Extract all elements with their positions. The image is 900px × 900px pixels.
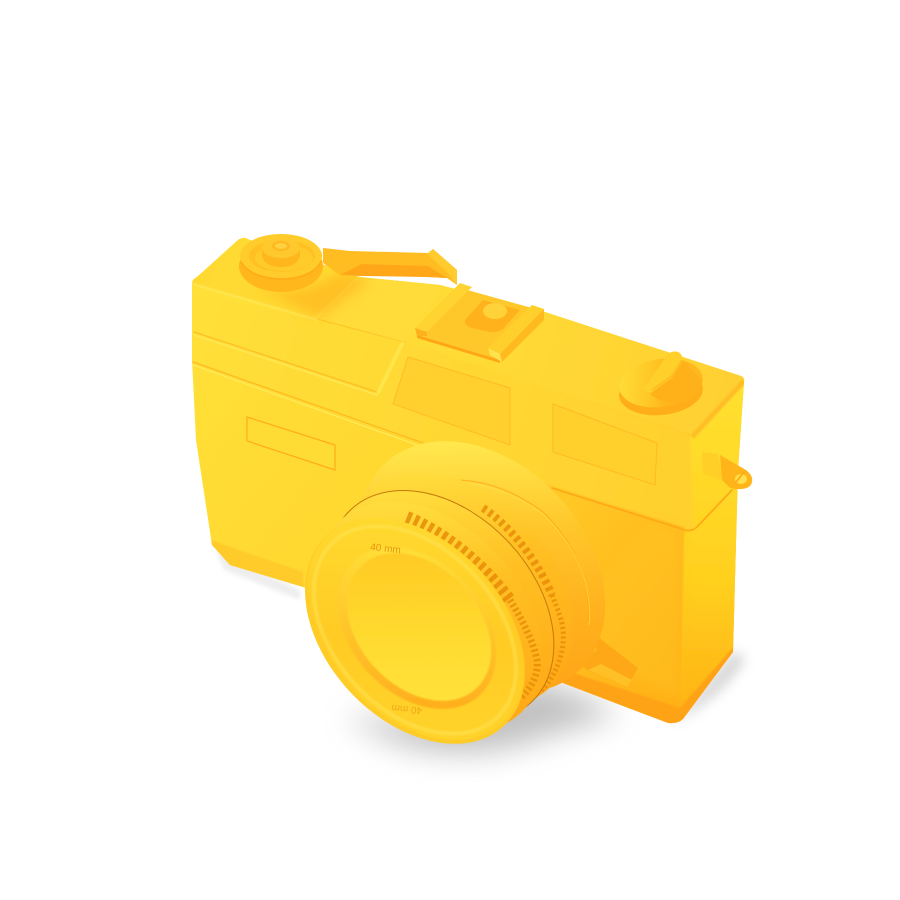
lens: front knurled ring [273, 458, 587, 776]
body: shadow behind dial [271, 272, 366, 320]
body: lower left chamfer [211, 540, 304, 588]
shutter dial: orange wedge [650, 360, 702, 403]
strap lug [702, 452, 752, 489]
hot shoe: button recess [465, 300, 520, 332]
lens: front rim [261, 475, 569, 787]
lens: focus ring [297, 427, 619, 753]
lens: focal length mark top: 40 mm [370, 542, 401, 556]
tripod lever [575, 633, 638, 687]
lens: centre plate [318, 525, 520, 729]
lens: seam between rings [283, 446, 599, 766]
hot shoe: left rail [415, 283, 472, 332]
viewfinder window [393, 357, 510, 445]
body: right side face [680, 372, 750, 712]
camera body [180, 230, 760, 730]
body: top plate lip near corner [692, 381, 744, 437]
lens: inner recess [306, 516, 528, 740]
lens: rear knurling [483, 508, 563, 692]
body: viewfinder hump [317, 277, 445, 342]
shutter dial: grip ridge [643, 351, 683, 393]
ground shadow [215, 550, 745, 753]
lens: rear barrel [309, 392, 655, 742]
hot shoe [415, 283, 544, 363]
hot shoe: centre button [483, 303, 507, 319]
lens [261, 392, 655, 787]
body: silhouette [180, 230, 760, 730]
hot shoe: right rail [488, 305, 544, 354]
body: soft light on lower right [560, 520, 680, 700]
rewind dial [239, 234, 323, 292]
shutter dial: side wall [617, 365, 705, 419]
body: seam lines [193, 277, 732, 531]
hot shoe: base plate [417, 288, 532, 362]
shutter dial: top [616, 353, 706, 413]
rewind dial: knob [262, 248, 300, 267]
body: bottom chamfer [562, 647, 733, 724]
body: top plate [185, 232, 750, 435]
lens: focal length mark bottom: 40 mm [391, 701, 423, 716]
rangefinder window [553, 404, 657, 485]
nameplate rectangle [247, 417, 335, 470]
body: soft-shaded faces [185, 232, 750, 728]
body: upper front band [192, 360, 692, 529]
lever [323, 248, 457, 285]
illustration: yellow 3D camera [192, 234, 752, 769]
rewind dial: side wall [239, 240, 323, 292]
rewind dial: ring [240, 234, 322, 278]
shutter dial [616, 351, 706, 419]
